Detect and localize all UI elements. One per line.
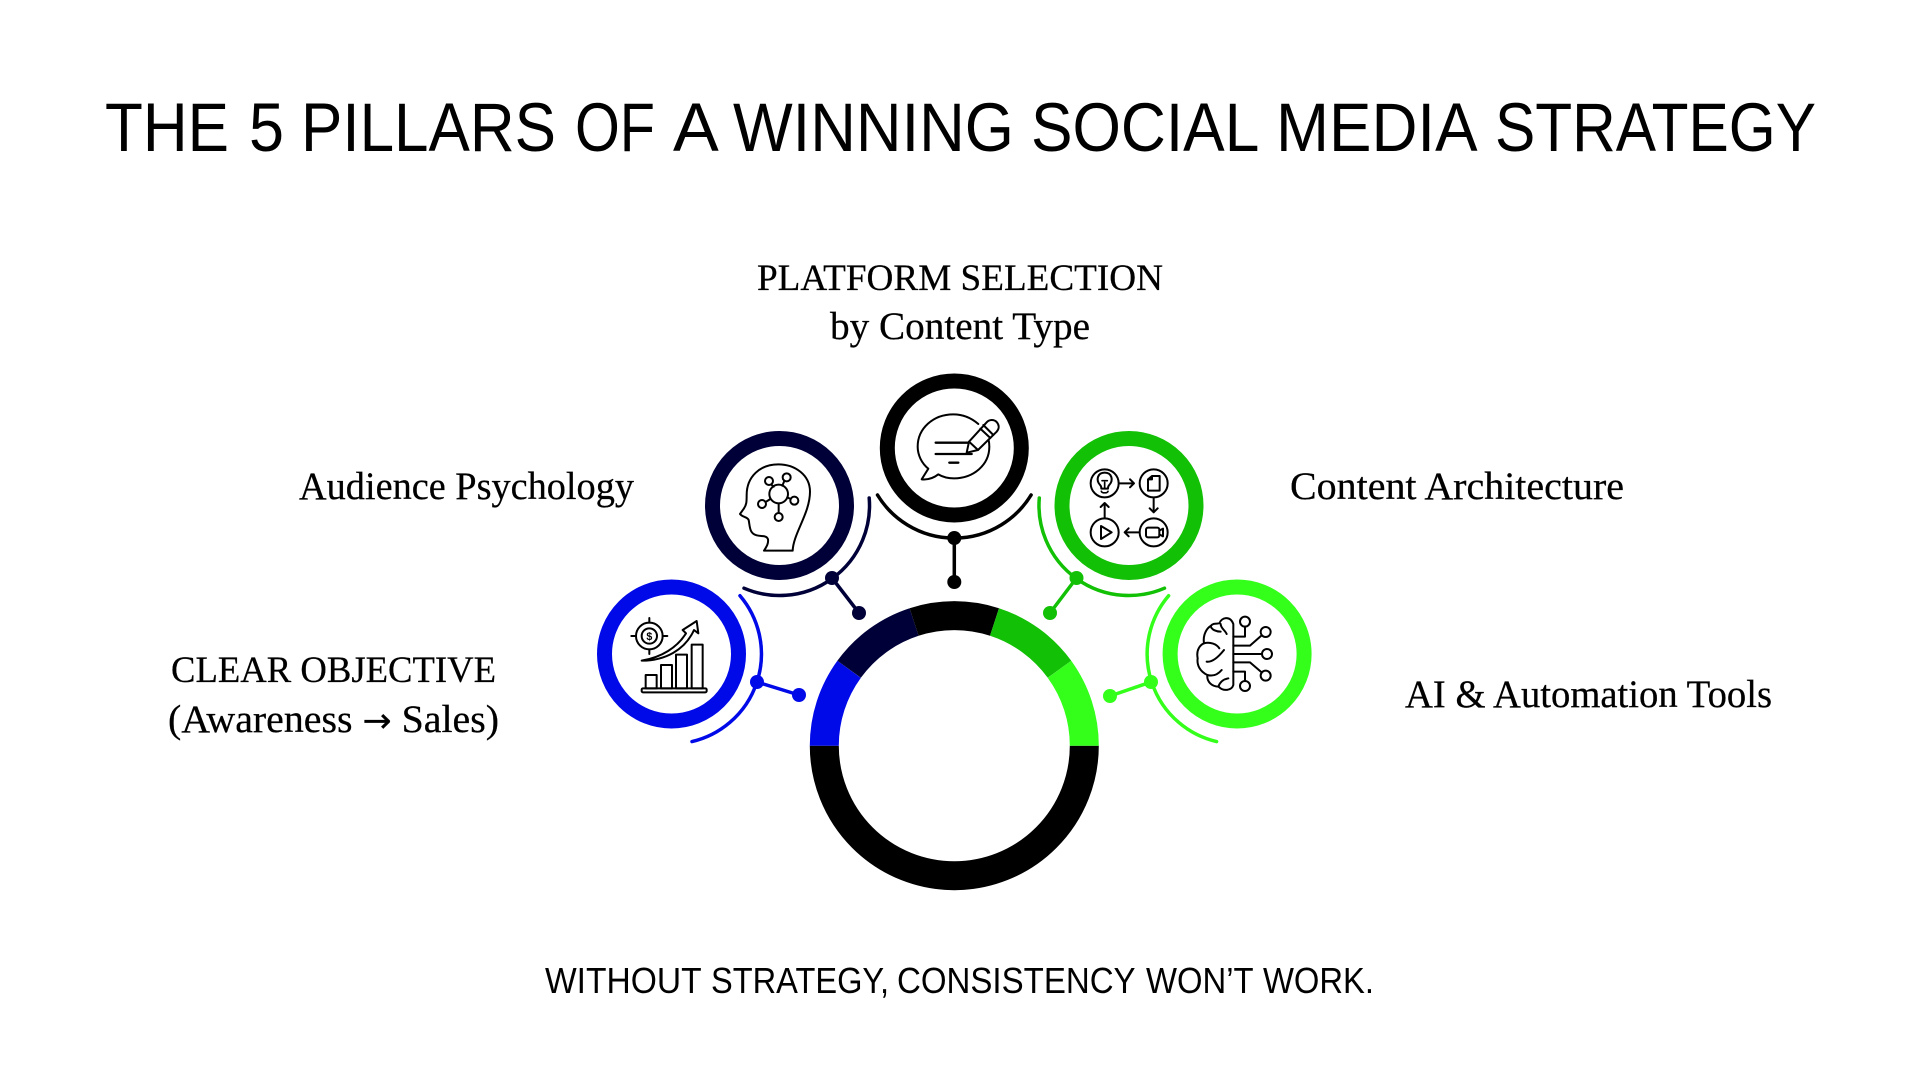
ring: black xyxy=(887,381,1021,515)
title: A xyxy=(673,89,719,166)
title: WINNING xyxy=(733,89,1014,166)
label: platform selection: PLATFORM SELECTION xyxy=(757,258,1163,299)
ring: navy xyxy=(712,438,846,572)
label: platform selection: by Content Type xyxy=(830,305,1090,348)
title: STRATEGY xyxy=(1495,89,1816,166)
icon: target and growth chart xyxy=(631,618,707,692)
ring: blue xyxy=(604,587,738,721)
title: MEDIA xyxy=(1276,89,1477,166)
pillar: audience psychology node xyxy=(712,438,870,620)
ring: lime xyxy=(1170,587,1304,721)
label: clear objective: CLEAR OBJECTIVE xyxy=(171,650,496,691)
icon: content workflow cycle xyxy=(1091,469,1168,546)
central segmented ring xyxy=(824,616,1084,876)
pillar: clear objective node xyxy=(604,587,806,742)
title: 5 xyxy=(249,89,284,166)
closing statement: WITHOUT xyxy=(545,960,702,1001)
connector: black arc and dots xyxy=(878,495,1031,589)
closing statement: CONSISTENCY xyxy=(897,960,1136,1001)
pillar: content architecture node xyxy=(1039,438,1196,620)
connector: lime arc and dots xyxy=(1103,596,1217,742)
closing statement: WORK. xyxy=(1263,960,1374,1001)
pillar: ai and automation node xyxy=(1103,587,1304,742)
label: content architecture: Content Architecture xyxy=(1290,465,1624,508)
label: audience psychology: Audience Psychology xyxy=(299,465,634,508)
label: platform selection xyxy=(757,258,1163,348)
icon: head with network xyxy=(740,464,810,551)
connector: navy arc and dots xyxy=(744,498,870,620)
closing statement: WON’T xyxy=(1146,960,1254,1001)
connector: green arc and dots xyxy=(1039,498,1164,620)
ring: green xyxy=(1062,438,1196,572)
icon: target and growth chart: $ xyxy=(646,631,652,643)
label: clear objective: (Awareness → Sales) xyxy=(168,698,499,741)
closing statement: STRATEGY, xyxy=(711,960,889,1001)
title: THE xyxy=(105,89,229,166)
connector: blue arc and dots xyxy=(692,596,806,742)
title: OF xyxy=(575,89,655,166)
label: clear objective xyxy=(168,650,499,741)
title: SOCIAL xyxy=(1031,89,1258,166)
icon: brain with circuit xyxy=(1197,617,1272,691)
title: PILLARS xyxy=(301,89,556,166)
pillar: platform selection node xyxy=(878,381,1031,589)
icon: speech bubble with pencil xyxy=(918,414,999,479)
label: ai and automation tools: AI & Automation Tools xyxy=(1405,673,1772,716)
